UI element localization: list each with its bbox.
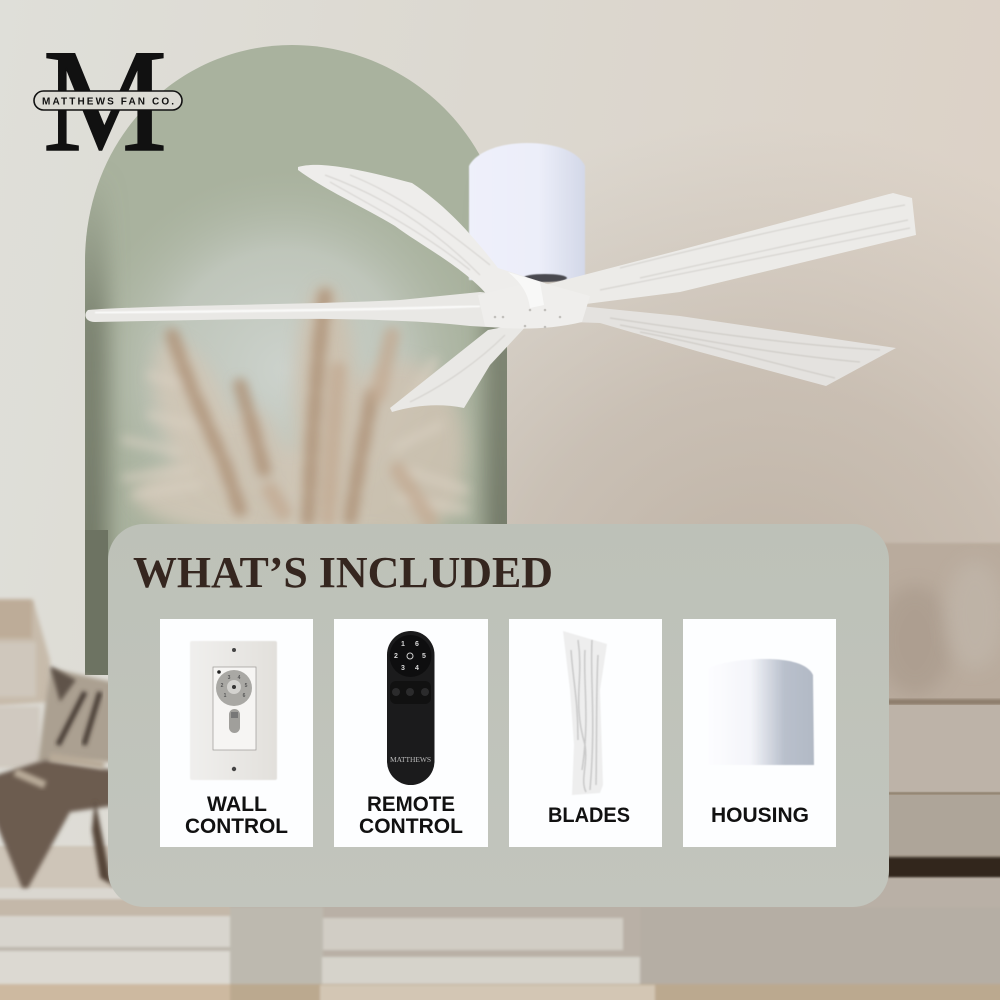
icon: wall control plate: 2	[221, 683, 224, 689]
label: wall control: WALL	[207, 793, 267, 816]
icon: remote control	[387, 631, 434, 785]
blade: upper left	[298, 165, 545, 312]
background: floor	[0, 846, 1000, 1000]
blade: lower left	[390, 322, 530, 412]
icon: blade	[563, 631, 607, 795]
blade: lower right	[570, 305, 896, 386]
fan housing	[469, 143, 585, 282]
label: housing: HOUSING	[711, 804, 809, 827]
ceiling fan	[85, 143, 916, 412]
icon: wall control plate: 4	[238, 675, 241, 681]
background: sofa right	[560, 543, 1000, 878]
fan hub	[478, 272, 590, 329]
blade: upper right	[540, 193, 916, 310]
label: remote control	[359, 793, 463, 838]
card: remote control	[334, 619, 488, 847]
panel: what's included	[108, 524, 889, 907]
label: remote control: CONTROL	[359, 815, 463, 838]
blade: long left	[85, 292, 510, 328]
background: armchair and blanket	[0, 600, 112, 888]
card: blades	[509, 619, 662, 847]
card: wall control	[160, 619, 313, 847]
icon: wall control plate: 1	[224, 693, 227, 699]
icon: wall control plate	[190, 641, 277, 780]
icon: wall control plate: 5	[245, 683, 248, 689]
icon: remote control: 5	[422, 653, 426, 660]
icon: wall control plate: 3	[228, 675, 231, 681]
label: remote control: REMOTE	[367, 793, 455, 816]
icon: remote control: 4	[415, 665, 419, 672]
logo name pill	[34, 91, 182, 110]
label: wall control	[185, 793, 288, 838]
icon: housing	[708, 659, 814, 765]
background: arched alcove	[70, 45, 522, 690]
logo letter M: M	[43, 19, 167, 182]
icon: remote control: 1	[401, 641, 405, 648]
background: pampas grass	[125, 285, 465, 540]
icon: wall control plate: 6	[243, 693, 246, 699]
card: housing	[683, 619, 836, 847]
icon: remote control: 3	[401, 665, 405, 672]
heading: WHAT’S INCLUDED	[133, 548, 553, 597]
logo: Matthews Fan Co.	[34, 19, 182, 182]
logo name pill: MATTHEWS FAN CO.	[42, 96, 174, 108]
label: blades: BLADES	[548, 804, 630, 827]
label: wall control: CONTROL	[185, 815, 288, 838]
icon: remote control: 6	[415, 641, 419, 648]
icon: remote control: 2	[394, 653, 398, 660]
icon: remote control: MATTHEWS	[390, 755, 431, 764]
